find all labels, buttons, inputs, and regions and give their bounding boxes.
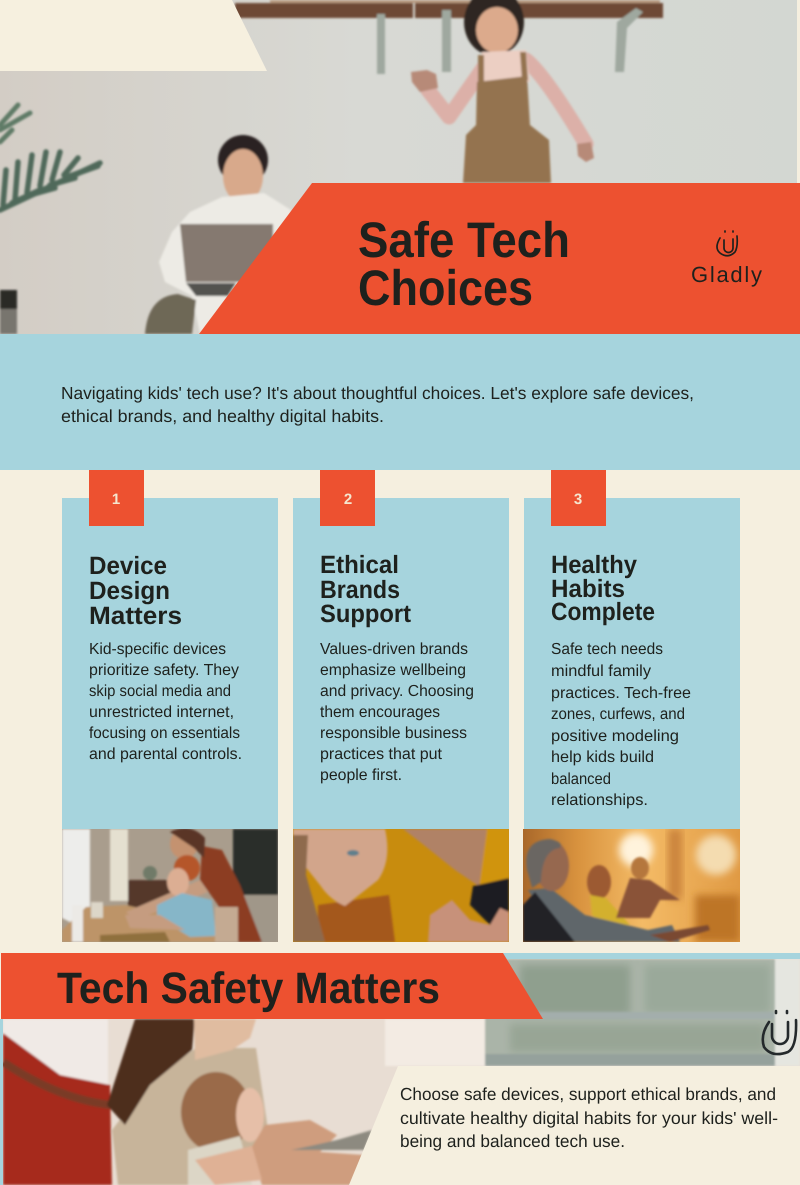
body text: and parental controls. <box>89 746 242 763</box>
title: Choices <box>358 260 533 316</box>
number badge 1 <box>89 470 144 526</box>
logo: Gladly <box>691 231 762 287</box>
body text: zones, curfews, and <box>551 706 685 723</box>
heading: Habits <box>551 575 625 603</box>
closing text <box>400 1084 778 1151</box>
number badge 1: 1 <box>112 491 120 508</box>
photo: mother and son at computer <box>62 828 278 942</box>
body text <box>551 641 691 809</box>
body text: Safe tech needs <box>551 641 663 658</box>
number badge 2: 2 <box>344 491 352 508</box>
panel: healthy habits <box>524 470 740 829</box>
body text: mindful family <box>551 663 651 680</box>
closing text: Choose safe devices, support ethical brands, and <box>400 1084 776 1104</box>
title <box>358 212 570 316</box>
mother <box>218 135 268 185</box>
closing text: being and balanced tech use. <box>400 1131 625 1151</box>
logo watermark <box>763 1011 796 1054</box>
body text: focusing on essentials <box>89 725 240 742</box>
body text: them encourages <box>320 704 440 721</box>
hero photo: mother with laptop and child <box>0 0 800 334</box>
body text: prioritize safety. They <box>89 662 239 679</box>
heading: Ethical <box>320 551 399 579</box>
heading: Healthy <box>551 551 637 579</box>
closing photo: mother and child with laptop <box>3 959 800 1185</box>
child <box>428 64 486 117</box>
body text: emphasize wellbeing <box>320 662 466 679</box>
number badge 2 <box>320 470 375 526</box>
body text: practices. Tech-free <box>551 685 691 702</box>
heading: Complete <box>551 598 655 626</box>
heading: Design <box>89 577 170 605</box>
left accent strip <box>0 1019 3 1185</box>
body text: balanced <box>551 771 611 788</box>
heading: Matters <box>89 602 182 630</box>
intro text <box>61 383 694 426</box>
title: Safe Tech <box>358 212 570 268</box>
body text: Kid-specific devices <box>89 641 226 658</box>
title banner <box>199 183 800 334</box>
closing text panel <box>349 1066 800 1185</box>
body text: unrestricted internet, <box>89 704 234 721</box>
body text: and privacy. Choosing <box>320 683 474 700</box>
panel: device design <box>62 470 278 829</box>
accent strip above closing photo <box>500 953 800 959</box>
heading: Support <box>320 600 412 628</box>
heading <box>89 552 182 630</box>
body text <box>89 641 242 763</box>
photo: family cycling at sunset <box>523 829 740 942</box>
heading: Device <box>89 552 167 580</box>
logo: Gladly: Gladly <box>691 262 762 287</box>
intro text: ethical brands, and healthy digital habits. <box>61 406 384 426</box>
body text: responsible business <box>320 725 467 742</box>
closing text: cultivate healthy digital habits for your kids' well- <box>400 1108 778 1128</box>
body text: people first. <box>320 767 402 784</box>
body text <box>320 641 474 784</box>
intro band <box>0 334 800 470</box>
heading: Brands <box>320 576 400 604</box>
body text: relationships. <box>551 792 648 809</box>
photo: child and parent with phone <box>293 829 509 942</box>
body text: positive modeling <box>551 728 679 745</box>
heading: Tech Safety Matters <box>57 964 440 1013</box>
number badge 3: 3 <box>574 491 582 508</box>
closing banner <box>1 953 543 1019</box>
heading <box>320 551 412 628</box>
body text: skip social media and <box>89 683 231 700</box>
panel: ethical brands <box>293 470 509 829</box>
cream corner shape <box>0 0 267 71</box>
body text: practices that put <box>320 746 443 763</box>
body text: help kids build <box>551 749 654 766</box>
body text: Values-driven brands <box>320 641 468 658</box>
intro text: Navigating kids' tech use? It's about thoughtful choices. Let's explore safe devices, <box>61 383 694 403</box>
number badge 3 <box>551 470 606 526</box>
heading <box>551 551 655 626</box>
